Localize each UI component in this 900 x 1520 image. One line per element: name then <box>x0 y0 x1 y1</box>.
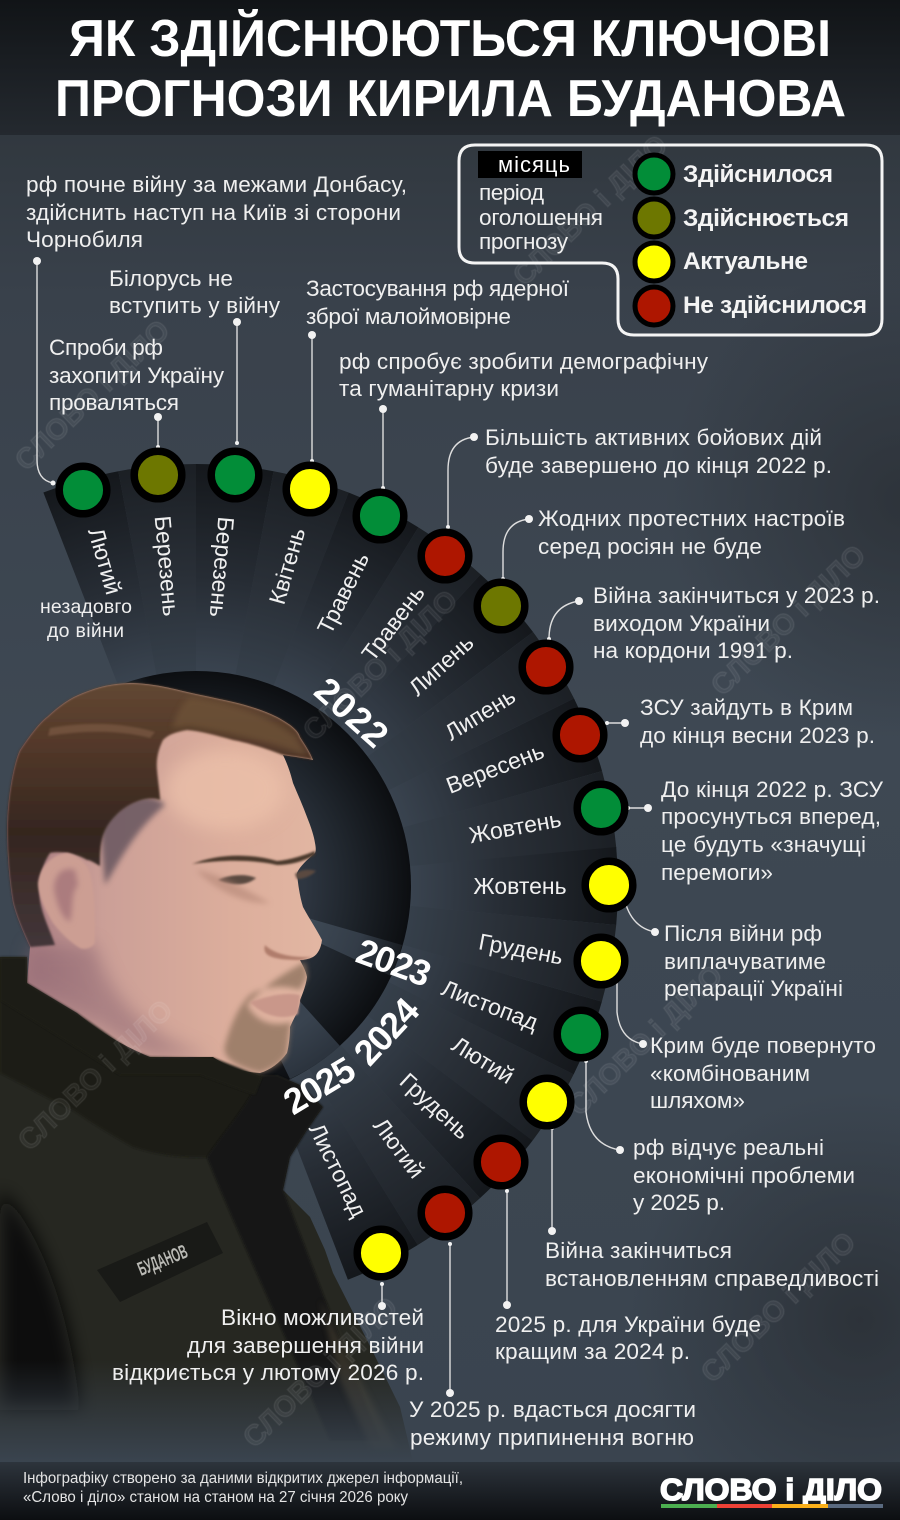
year labels <box>276 669 437 1123</box>
legend: fulfilled: Здійснилося <box>683 161 833 188</box>
legend: fulfilled <box>635 155 833 193</box>
watermarks: СЛОВО і ДІЛО <box>9 314 176 477</box>
watermarks: СЛОВО і ДІЛО <box>237 1291 404 1454</box>
head <box>0 680 330 1080</box>
month labels: Жовтень <box>473 873 567 899</box>
eye <box>218 870 316 884</box>
ear <box>38 853 95 949</box>
forecast: ceasefire: режиму припинення вогню <box>410 1425 694 1450</box>
forecast: no protests <box>538 506 845 559</box>
legend: month sample: місяць <box>498 152 570 177</box>
month labels: Травень <box>356 580 430 666</box>
footer band <box>0 1462 900 1520</box>
watermarks: СЛОВО і ДІЛО <box>12 994 179 1157</box>
forecast: Crimea combined: шляхом» <box>650 1088 745 1113</box>
forecast: active fighting <box>485 425 832 478</box>
legend: not fulfilled: Не здійснилося <box>683 292 867 319</box>
month labels <box>83 515 567 1222</box>
watermarks: СЛОВО і ДІЛО <box>562 959 729 1122</box>
name patch: БУДАНОВ <box>135 1242 191 1281</box>
forecast: window of opportunity: відкриється у лютому 2026 р. <box>112 1360 424 1385</box>
forecast: Belarus: Білорусь не <box>109 266 233 291</box>
month labels: Травень <box>312 548 374 638</box>
forecast: nuclear: Застосування рф ядерної <box>306 276 570 301</box>
connector lines <box>33 257 659 1397</box>
forehead highlight <box>165 750 285 830</box>
forecast: Crimea combined: Крим буде повернуто <box>650 1033 876 1058</box>
month labels: Жовтень <box>467 806 563 848</box>
legend: period caption: оголошення <box>479 205 603 230</box>
forecast: crisis: та гуманітарну кризи <box>339 376 559 401</box>
month labels: Листопад <box>438 975 542 1036</box>
year labels: 2022 <box>307 669 397 756</box>
title <box>55 9 846 128</box>
year labels: 2025 <box>276 1048 362 1123</box>
neck shadow <box>27 945 213 1057</box>
forecast: reparations: Після війни рф <box>664 921 822 946</box>
forecast: Crimea spring: ЗСУ зайдуть в Крим <box>640 695 853 720</box>
forecast: war ends 2023: на кордони 1991 р. <box>593 638 793 663</box>
forecast: Belarus: вступить у війну <box>109 293 281 318</box>
forecast: war ends 2023: Війна закінчиться у 2023 р. <box>593 583 880 608</box>
forecast: economic problems <box>633 1135 855 1215</box>
lips <box>250 994 300 1017</box>
legend: relevant <box>635 243 808 281</box>
month labels: Лютий <box>368 1113 430 1183</box>
jacket <box>0 957 420 1462</box>
legend: month sample <box>478 151 582 178</box>
month labels: Липень <box>440 682 520 746</box>
forecast: advance: До кінця 2022 р. ЗСУ <box>661 777 884 802</box>
legend: relevant: Актуальне <box>683 248 808 275</box>
forecast: justice <box>545 1238 879 1291</box>
forecast: reparations <box>664 921 843 1001</box>
forecast: economic problems: рф відчує реальні <box>633 1135 824 1160</box>
legend <box>459 145 882 335</box>
forecast: crisis <box>339 349 709 401</box>
note: shortly before the war: до війни <box>47 620 124 642</box>
status bulbs on the fan <box>59 451 633 1277</box>
note: shortly before the war: незадовго <box>40 596 132 618</box>
year labels: 2023 <box>351 930 437 995</box>
forecast: no protests: серед росіян не буде <box>538 534 762 559</box>
legend: being fulfilled: Здійснюється <box>683 205 849 232</box>
forecast: Crimea spring <box>640 695 875 748</box>
watermarks: СЛОВО і ДІЛО <box>297 584 464 747</box>
forecast: advance: це будуть «значущі <box>661 832 866 857</box>
legend: being fulfilled <box>635 199 849 237</box>
forecast: ceasefire <box>409 1397 696 1450</box>
forecast: Crimea combined: «комбінованим <box>650 1061 810 1086</box>
forecast: Crimea combined <box>650 1033 876 1113</box>
year labels: 2024 <box>345 990 427 1073</box>
footer note: «Слово і діло» станом на станом на 27 січня 2026 року <box>23 1489 408 1506</box>
forecast: economic problems: економічні проблеми <box>633 1163 855 1188</box>
forecast: nuclear <box>306 276 570 329</box>
footer note: Інфографіку створено за даними відкритих джерел інформації, <box>23 1470 463 1487</box>
month labels: Грудень <box>395 1068 475 1144</box>
forecast: 2025 better: кращим за 2024 р. <box>495 1339 690 1364</box>
forecast: active fighting: буде завершено до кінця 2022 р. <box>485 453 832 478</box>
watermarks: СЛОВО і ДІЛО <box>695 1226 862 1389</box>
forecast: beyond Donbas: здійснить наступ на Київ зі сторони <box>26 200 401 225</box>
watermarks: СЛОВО і ДІЛО <box>705 539 872 702</box>
forecast: war ends 2023: виходом України <box>593 611 770 636</box>
month labels: Лютий <box>83 525 127 597</box>
forelock <box>172 697 307 756</box>
jacket collar over chin <box>0 957 262 1095</box>
forecast: beyond Donbas <box>26 172 407 252</box>
forecast: seizing Ukraine: проваляться <box>49 390 179 415</box>
forecast: ceasefire: У 2025 р. вдасться досягти <box>409 1397 696 1422</box>
legend: period caption: прогнозу <box>479 229 569 254</box>
portrait of Kyrylo Budanov <box>0 680 420 1462</box>
watermarks: СЛОВО і ДІЛО <box>507 129 674 292</box>
month labels: Лютий <box>447 1031 519 1089</box>
month labels: Грудень <box>477 928 565 970</box>
forecast: nuclear: зброї малоймовірне <box>306 304 511 329</box>
forecast: Crimea spring: до кінця весни 2023 р. <box>640 723 875 748</box>
forecast: seizing Ukraine <box>49 335 225 415</box>
forecast: active fighting: Більшість активних бойових дій <box>485 425 822 450</box>
logo: СЛОВО і ДІЛО <box>660 1472 882 1507</box>
forecast: window of opportunity <box>112 1305 424 1385</box>
legend: period caption <box>479 180 603 254</box>
month labels: Березень <box>205 516 239 618</box>
forecast: seizing Ukraine: захопити Україну <box>49 363 225 388</box>
footer note <box>23 1470 463 1506</box>
hair streak <box>48 724 155 738</box>
forecast: justice: встановленням справедливості <box>545 1266 879 1291</box>
forecast: 2025 better: 2025 р. для України буде <box>495 1312 761 1337</box>
moustache and goatee <box>224 962 307 1073</box>
month labels: Вересень <box>442 737 548 799</box>
month labels: Листопад <box>304 1119 372 1222</box>
legend frame <box>459 145 882 335</box>
nose shadow <box>264 945 313 960</box>
forecast: no protests: Жодних протестних настроїв <box>538 506 845 531</box>
forecast: crisis: рф спробує зробити демографічну <box>339 349 709 374</box>
forecast: Belarus <box>109 266 281 318</box>
forecast: reparations: репарації Україні <box>664 976 843 1001</box>
name patch <box>97 1222 223 1302</box>
forecast: war ends 2023 <box>593 583 880 663</box>
title: ЯК ЗДІЙСНЮЮТЬСЯ КЛЮЧОВІ <box>69 9 831 68</box>
forecast: reparations: виплачуватиме <box>664 949 826 974</box>
forecast: economic problems: у 2025 р. <box>633 1190 725 1215</box>
forecast: advance: просунуться вперед, <box>661 804 881 829</box>
inner dark circle <box>124 671 411 1080</box>
note: shortly before the war <box>40 596 132 642</box>
legend: not fulfilled <box>635 287 867 325</box>
legend: period caption: період <box>479 180 544 205</box>
hair <box>7 683 313 947</box>
month labels: Липень <box>403 629 479 701</box>
forecast: advance: перемоги» <box>661 860 773 885</box>
forecast: advance <box>661 777 884 885</box>
temple fade <box>100 797 165 885</box>
header band <box>0 0 900 135</box>
forecast: beyond Donbas: рф почне війну за межами Донбасу, <box>26 172 407 197</box>
forecast: window of opportunity: Вікно можливостей <box>221 1305 424 1330</box>
forecast: justice: Війна закінчиться <box>545 1238 732 1263</box>
month labels: Березень <box>150 515 184 617</box>
forecast: window of opportunity: для завершення війни <box>187 1333 424 1358</box>
title: ПРОГНОЗИ КИРИЛА БУДАНОВА <box>55 70 846 128</box>
forecast: beyond Donbas: Чорнобиля <box>26 227 143 252</box>
brow <box>192 851 315 865</box>
forecast: seizing Ukraine: Спроби рф <box>49 335 163 360</box>
forecast: 2025 better <box>495 1312 761 1364</box>
month labels: Квітень <box>264 525 310 607</box>
chart: radial fan of sectors <box>43 462 618 1281</box>
